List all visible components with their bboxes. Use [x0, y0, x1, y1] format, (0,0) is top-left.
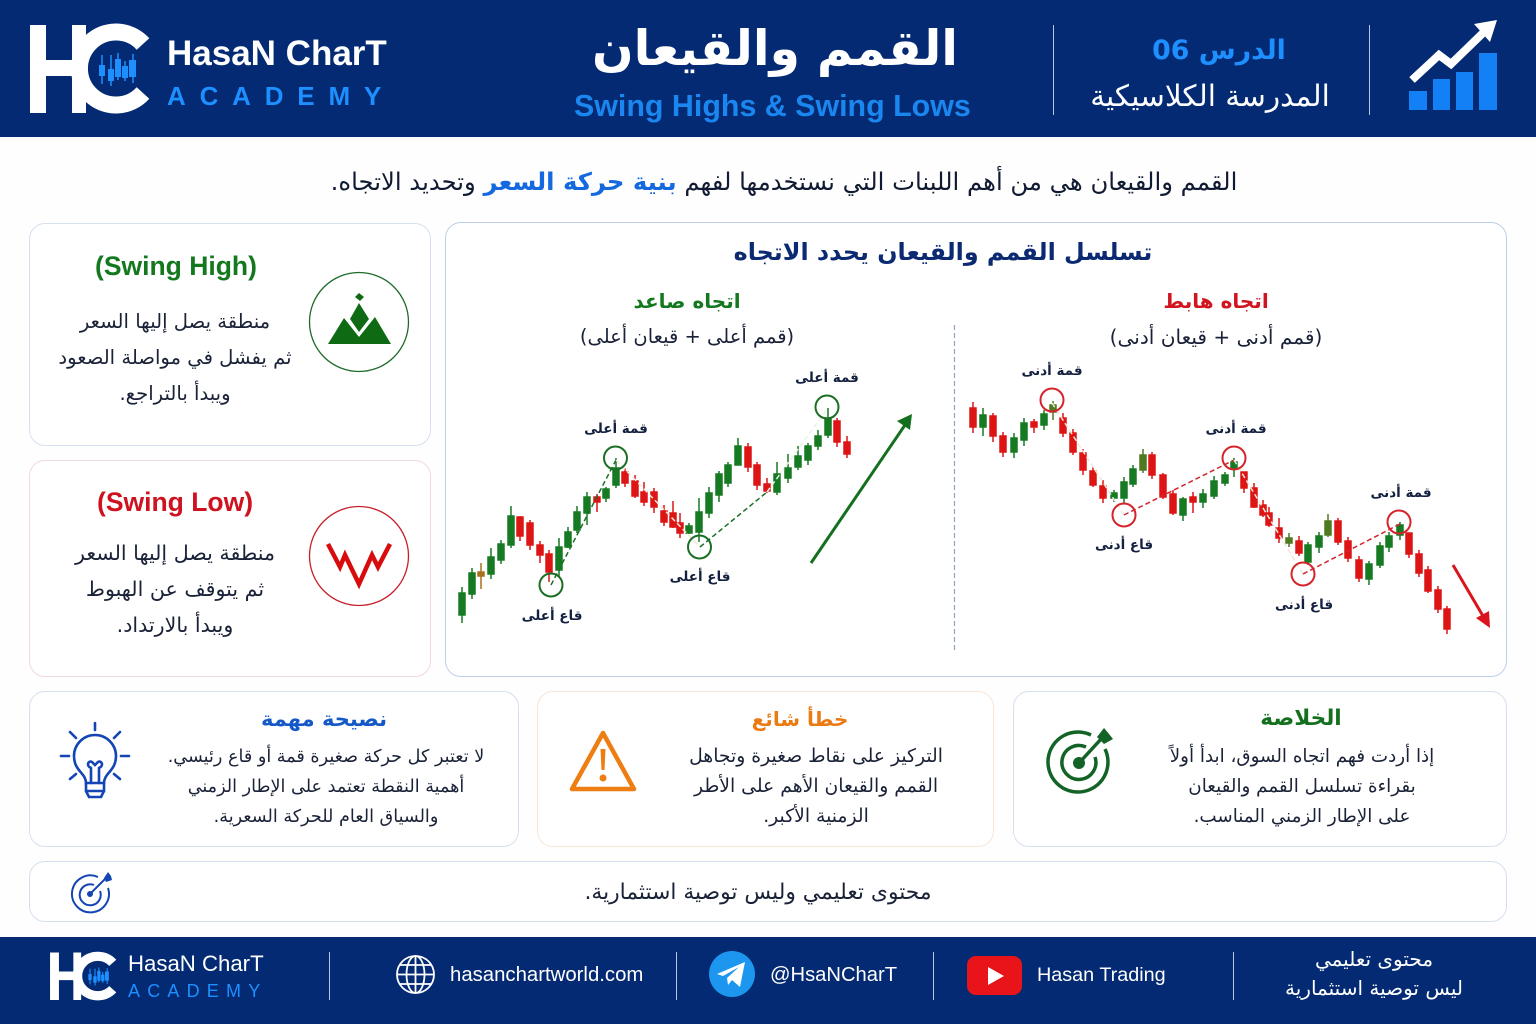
intro sentence: القمم والقيعان هي من أهم اللبنات التي نستخدمها لفهم بنية حركة السعر وتحديد الاتجاه. — [331, 167, 1237, 196]
uptrend heading: اتجاه صاعد — [633, 289, 741, 313]
body text: منطقة يصل إليها السعر — [75, 541, 275, 565]
body text — [689, 746, 943, 827]
uptrend description: (قمم أعلى + قيعان أعلى) — [580, 325, 794, 348]
label: higher low 1: قاع أعلى — [522, 607, 582, 624]
footer note — [1285, 947, 1463, 1000]
chart: uptrend candlesticks — [459, 369, 912, 624]
panel heading: تسلسل القمم والقيعان يحدد الاتجاه — [734, 238, 1152, 266]
label: lower high 2: قمة أدنى — [1205, 420, 1267, 437]
footer brand name: HasaN CharT — [128, 951, 264, 976]
body text: والسياق العام للحركة السعرية. — [214, 807, 438, 827]
label: higher low 2: قاع أعلى — [670, 568, 730, 585]
website: hasanchartworld.com — [450, 964, 643, 986]
body text: على الإطار الزمني المناسب. — [1194, 806, 1410, 827]
subtitle: Swing Highs & Swing Lows — [574, 89, 971, 123]
body text: التركيز على نقاط صغيرة وتجاهل — [689, 746, 943, 767]
brand name: HasaN CharT — [167, 34, 387, 73]
disclaimer text: محتوى تعليمي وليس توصية استثمارية. — [584, 880, 932, 905]
disclaimer strip — [29, 861, 1507, 922]
swing point circles — [1040, 388, 1410, 586]
dashed swing lines — [551, 408, 828, 585]
school name: المدرسة الكلاسيكية — [1090, 79, 1330, 113]
brand subtitle: ACADEMY — [167, 81, 395, 111]
footer brand subtitle: ACADEMY — [128, 981, 267, 1001]
icon: target — [1046, 728, 1113, 794]
footer note: ليس توصية استثمارية — [1285, 976, 1463, 1000]
telegram handle: @HsaNCharT — [770, 964, 897, 986]
panel: trend sequence — [445, 222, 1507, 677]
body text: ثم يفشل في مواصلة الصعود — [58, 346, 292, 369]
body text — [58, 310, 292, 405]
candles — [970, 401, 1450, 634]
heading: (Swing Low) — [97, 487, 253, 517]
panel: tip — [29, 691, 519, 847]
body text: منطقة يصل إليها السعر — [80, 310, 270, 333]
body text: الزمنية الأكبر. — [763, 806, 869, 827]
panel: common mistake — [537, 691, 994, 847]
dashed swing lines — [1052, 403, 1400, 574]
logo: HC candlestick mark — [30, 24, 150, 114]
panel: swing high — [29, 223, 431, 446]
icon: globe — [396, 955, 435, 994]
youtube channel: Hasan Trading — [1037, 964, 1166, 986]
body text: ويبدأ بالارتداد. — [117, 613, 233, 637]
body text: ويبدأ بالتراجع. — [119, 382, 231, 405]
footer note: محتوى تعليمي — [1315, 947, 1433, 971]
heading: خطأ شائع — [752, 707, 848, 731]
downtrend heading: اتجاه هابط — [1163, 289, 1269, 313]
candles — [459, 408, 850, 623]
body text: إذا أردت فهم اتجاه السوق، ابدأ أولاً — [1170, 746, 1434, 767]
icon: rising bars with arrow — [1409, 20, 1497, 110]
icon: warning triangle — [570, 730, 636, 792]
downtrend description: (قمم أدنى + قيعان أدنى) — [1110, 325, 1322, 349]
label: higher high 1: قمة أعلى — [584, 420, 648, 437]
body text — [74, 541, 275, 637]
icon: telegram — [709, 951, 755, 997]
body text — [1168, 744, 1434, 827]
body text: أهمية النقطة تعتمد على الإطار الزمني — [188, 777, 464, 797]
icon: trough — [308, 506, 410, 606]
body text: ثم يتوقف عن الهبوط — [86, 577, 264, 601]
panel: swing low — [29, 460, 431, 677]
label: lower high 1: قمة أدنى — [1021, 362, 1083, 379]
arrow: downtrend — [1453, 565, 1490, 628]
body text — [168, 744, 484, 827]
icon: peak — [308, 272, 410, 372]
arrow: uptrend — [811, 414, 912, 563]
body text: لا تعتبر كل حركة صغيرة قمة أو قاع رئيسي. — [168, 747, 484, 767]
heading: (Swing High) — [95, 251, 257, 281]
label: lower high 3: قمة أدنى — [1370, 484, 1432, 501]
footer band — [0, 937, 1536, 1024]
header band — [0, 0, 1536, 137]
icon: small target — [70, 872, 112, 914]
chart: downtrend candlesticks — [970, 362, 1490, 634]
heading: الخلاصة — [1260, 706, 1342, 731]
swing point circles — [540, 396, 838, 596]
panel: summary — [1013, 691, 1507, 847]
body text: بقراءة تسلسل القمم والقيعان — [1188, 776, 1416, 797]
footer logo mark — [50, 952, 116, 1000]
label: higher high 2: قمة أعلى — [795, 369, 859, 386]
body text: القمم والقيعان الأهم على الأطر — [694, 776, 938, 797]
label: lower low 1: قاع أدنى — [1095, 536, 1153, 553]
icon: youtube — [967, 956, 1022, 995]
icon: light bulb — [60, 722, 130, 798]
heading: نصيحة مهمة — [261, 707, 387, 731]
label: lower low 2: قاع أدنى — [1275, 596, 1333, 613]
lesson number: الدرس 06 — [1152, 35, 1286, 66]
title: القمم والقيعان — [592, 20, 958, 77]
